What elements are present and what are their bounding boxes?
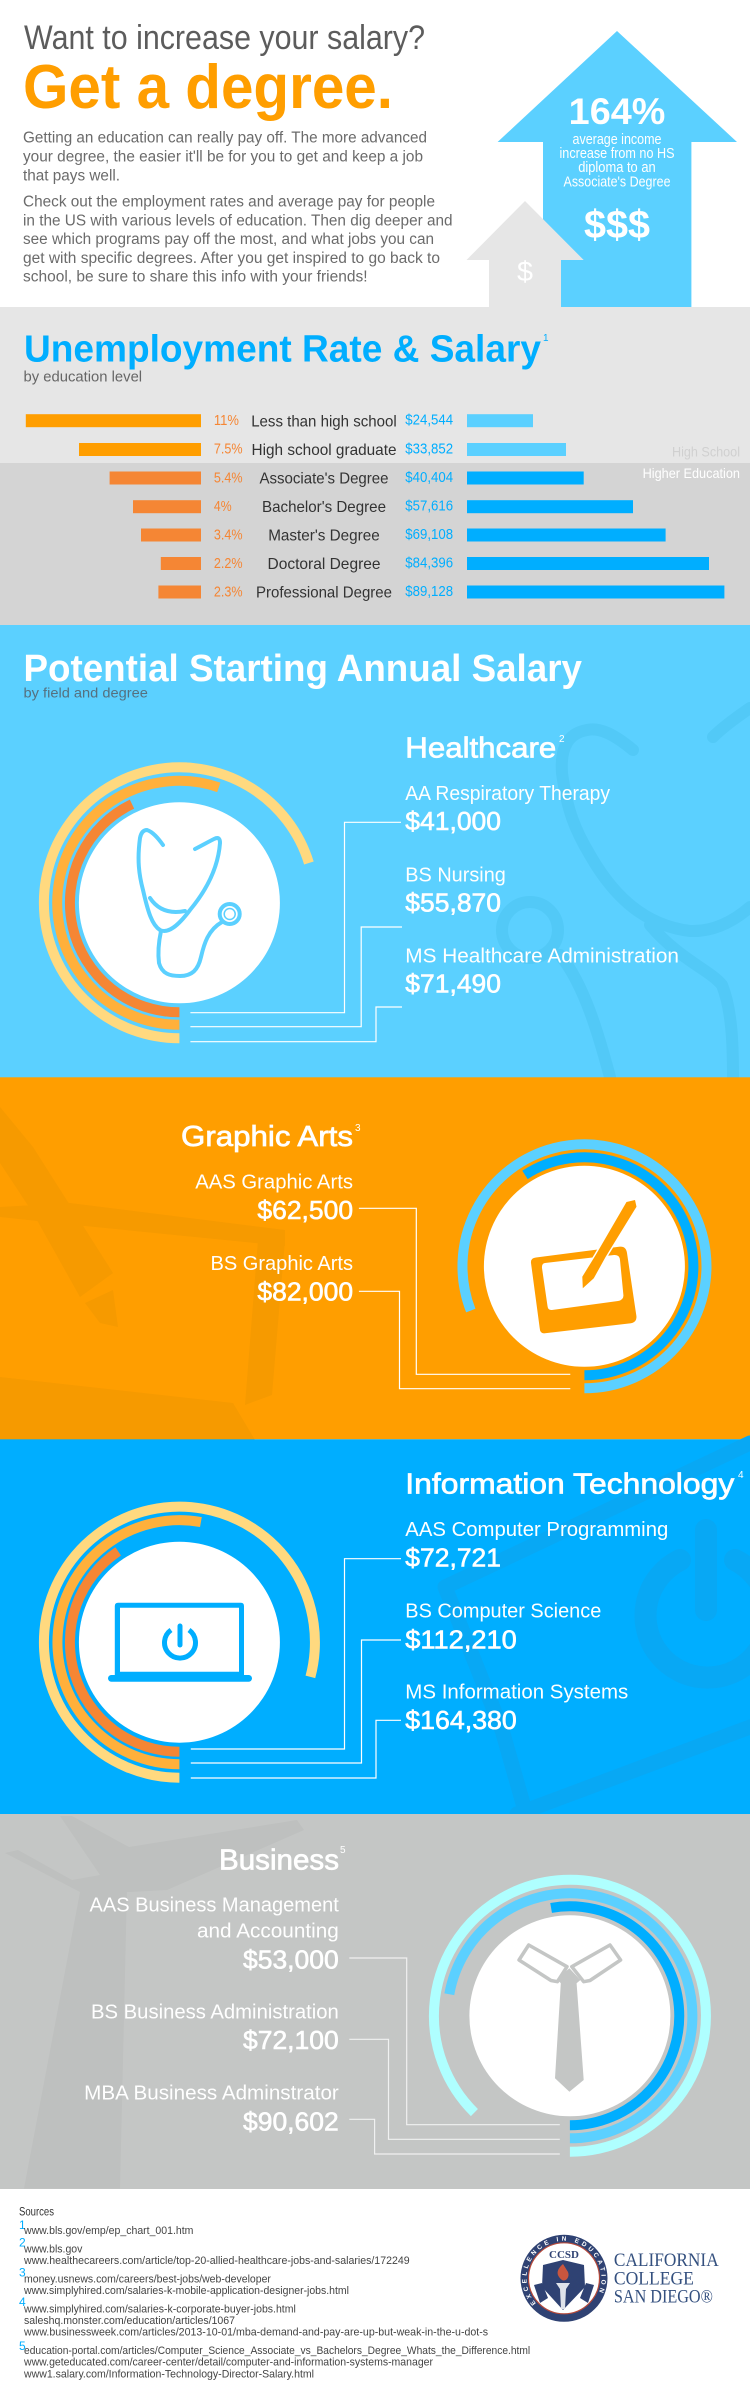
grey arrow with dollar sign: $ xyxy=(517,256,533,287)
title line: Want to increase your salary? xyxy=(24,19,425,57)
watermark tie xyxy=(5,1816,304,2188)
sources heading: Sources xyxy=(19,2207,54,2219)
salary: BS computer science: $112,210 xyxy=(405,1624,517,1654)
source group 5: www.geteducated.com/career-center/detail/computer-and-information-systems-manager xyxy=(23,2357,433,2369)
panel: graphic arts xyxy=(0,1077,750,1440)
education level labels: Doctoral Degree xyxy=(268,556,381,573)
salary: AAS graphic arts: $62,500 xyxy=(257,1195,353,1225)
connector lines xyxy=(190,822,402,1042)
source group 4: saleshq.monster.com/education/articles/1067 xyxy=(24,2315,235,2327)
salary: BS nursing xyxy=(405,864,506,918)
section subheading: by field and degree xyxy=(24,685,148,701)
blue arrow with statistic: increase from no HS xyxy=(560,146,674,162)
source group 4 xyxy=(19,2295,488,2339)
background xyxy=(0,1439,750,1814)
salary: MBA business administrator: $90,602 xyxy=(243,2107,339,2137)
connector lines xyxy=(359,1208,570,1389)
source group 4: www.simplyhired.com/salaries-k-corporate-buyer-jobs.html xyxy=(23,2303,296,2315)
salary: BS business administration: $72,100 xyxy=(243,2025,339,2055)
intro paragraph two: in the US with various levels of education. Then dig deeper and xyxy=(23,212,453,229)
salary: AAS business management: $53,000 xyxy=(243,1944,339,1974)
source group 4: 4 xyxy=(19,2295,26,2309)
source group 5: 5 xyxy=(19,2339,26,2353)
unemployment percentages: 11% xyxy=(214,413,239,429)
salary values: $89,128 xyxy=(405,584,453,600)
connector lines xyxy=(349,1958,560,2154)
salary bars xyxy=(467,414,724,598)
source group 4: www.businessweek.com/articles/2013-10-01/mba-demand-and-pay-are-up-but-weak-in-the-u-dot-s xyxy=(23,2327,488,2339)
salary: BS business administration xyxy=(91,2000,339,2055)
intro paragraph one: Getting an education can really pay off. The more advanced xyxy=(23,130,427,147)
salary: MBA business administrator: MBA Business Adminstrator xyxy=(84,2081,339,2104)
panel: unemployment rate and salary xyxy=(0,307,750,625)
background xyxy=(0,1077,750,1439)
title: get a degree: Get a degree. xyxy=(23,53,393,122)
field title: Business xyxy=(219,1844,339,1876)
watermark laptop and power symbol xyxy=(445,1443,750,1814)
salary: AAS computer programming: AAS Computer Programming xyxy=(405,1518,668,1541)
section heading: Potential Starting Annual Salary xyxy=(24,648,582,690)
background xyxy=(0,625,750,1078)
intro paragraph one xyxy=(23,130,427,184)
ring chart xyxy=(434,1880,706,2152)
field title: Information Technology xyxy=(405,1468,735,1500)
logo: college seal: EXCELLENCE IN EDUCATION xyxy=(522,2236,606,2306)
unemployment percentages: 4% xyxy=(214,499,232,515)
background high school band xyxy=(0,307,750,463)
source group 2 xyxy=(19,2236,410,2267)
blue arrow with statistic: diploma to an xyxy=(578,160,656,176)
salary: BS graphic arts: $82,000 xyxy=(257,1277,353,1307)
source group 2: www.bls.gov xyxy=(23,2243,83,2255)
salary values: $33,852 xyxy=(405,441,453,457)
icon: laptop with power symbol xyxy=(108,1603,252,1682)
logo: college name: COLLEGE xyxy=(614,2268,694,2289)
unemployment percentages: 5.4% xyxy=(214,470,243,486)
source group 2: www.healthecareers.com/article/top-20-allied-healthcare-jobs-and-salaries/172249 xyxy=(23,2255,410,2267)
source group 5: education-portal.com/articles/Computer_Science_Associate_vs_Bachelors_Degree_Whats_the_Difference.html xyxy=(24,2345,530,2357)
salary: MS information systems xyxy=(405,1681,628,1735)
logo: college name: SAN DIEGO® xyxy=(614,2287,713,2308)
panel: information technology xyxy=(0,1439,750,1814)
background higher education band xyxy=(0,463,750,625)
salary: AAS graphic arts xyxy=(195,1170,353,1225)
unemployment percentages: 7.5% xyxy=(214,442,243,458)
blue arrow with statistic: average income xyxy=(572,132,662,148)
intro paragraph two: Check out the employment rates and average pay for people xyxy=(23,194,435,211)
salary values: $57,616 xyxy=(405,499,453,515)
salary: AAS business management: and Accounting xyxy=(197,1920,339,1943)
unemployment percentages: 2.3% xyxy=(214,584,243,600)
legend: high school: High School xyxy=(672,444,740,460)
salary values: $24,544 xyxy=(405,413,453,429)
blue arrow with statistic: Associate's Degree xyxy=(564,175,670,191)
salary: AA respiratory therapy xyxy=(405,782,611,836)
legend: higher education: Higher Education xyxy=(643,465,740,481)
salary: BS graphic arts xyxy=(210,1252,353,1307)
background xyxy=(0,1814,750,2189)
intro paragraph two: see which programs pay off the most, and what jobs you can xyxy=(23,231,434,248)
grey arrow with dollar sign xyxy=(466,201,584,307)
blue arrow with statistic: 164% xyxy=(569,91,665,132)
footnote marker: 5 xyxy=(340,1845,346,1856)
panel: healthcare xyxy=(0,625,750,1078)
salary: AA respiratory therapy: $41,000 xyxy=(405,806,501,836)
watermark tablet and pen xyxy=(0,1107,285,1440)
unemployment percentages: 2.2% xyxy=(214,556,243,572)
logo: college seal: CCSD xyxy=(549,2249,579,2261)
education level labels: High school graduate xyxy=(252,442,397,459)
salary values xyxy=(405,413,453,600)
footnote marker: 2 xyxy=(559,734,565,745)
salary: AAS business management: AAS Business Management xyxy=(90,1894,339,1917)
education level labels: Professional Degree xyxy=(256,584,392,602)
field title: Healthcare xyxy=(405,733,556,765)
intro paragraph two xyxy=(23,194,453,286)
source group 3 xyxy=(19,2266,349,2297)
panel: business xyxy=(0,1814,750,2189)
panel: intro xyxy=(23,19,737,307)
salary: BS graphic arts: BS Graphic Arts xyxy=(210,1252,353,1275)
salary values: $69,108 xyxy=(405,527,453,543)
footnote marker: 4 xyxy=(738,1470,744,1481)
blue arrow with statistic: $$$ xyxy=(584,203,650,247)
source group 1 xyxy=(19,2218,193,2237)
icon: necktie and collar xyxy=(519,1945,621,2092)
source group 5: www1.salary.com/Information-Technology-Director-Salary.html xyxy=(23,2368,314,2380)
unemployment percentages: 3.4% xyxy=(214,528,243,544)
unemployment bars xyxy=(26,414,201,598)
source group 2: 2 xyxy=(19,2236,26,2250)
salary: BS nursing: BS Nursing xyxy=(405,864,506,887)
source group 3: 3 xyxy=(19,2266,26,2280)
watermark stethoscope xyxy=(502,708,750,1077)
salary: BS computer science: BS Computer Science xyxy=(405,1599,601,1622)
salary: MBA business administrator xyxy=(84,2081,339,2137)
salary: AA respiratory therapy: AA Respiratory Therapy xyxy=(405,782,611,805)
source group 3: www.simplyhired.com/salaries-k-mobile-application-designer-jobs.html xyxy=(23,2285,349,2297)
education level labels: Associate's Degree xyxy=(260,470,389,488)
salary: AAS business management xyxy=(90,1894,339,1974)
salary: AAS graphic arts: AAS Graphic Arts xyxy=(195,1170,353,1193)
source group 3: money.usnews.com/careers/best-jobs/web-developer xyxy=(24,2273,271,2285)
blue arrow with statistic xyxy=(498,31,737,307)
intro paragraph one: your degree, the easier it'll be for you to get and keep a job xyxy=(23,149,423,166)
salary: MS information systems: MS Information Systems xyxy=(405,1681,628,1704)
source group 1: 1 xyxy=(19,2218,26,2232)
salary: AAS computer programming: $72,721 xyxy=(405,1543,501,1573)
icon: stethoscope xyxy=(139,830,240,976)
logo: college name xyxy=(614,2250,719,2308)
footnote marker: 3 xyxy=(355,1123,361,1134)
intro paragraph two: get with specific degrees. After you get inspired to go back to xyxy=(23,250,440,267)
unemployment percentages xyxy=(214,413,243,600)
connector lines xyxy=(191,1559,401,1778)
source group 5 xyxy=(19,2339,530,2380)
ring chart xyxy=(44,767,309,1038)
source group 1: www.bls.gov/emp/ep_chart_001.htm xyxy=(23,2225,193,2237)
field title: Graphic Arts xyxy=(181,1121,353,1153)
salary: AAS computer programming xyxy=(405,1518,668,1573)
salary: MS healthcare administration xyxy=(405,945,679,999)
education level labels: Bachelor's Degree xyxy=(262,499,386,516)
education level labels: Less than high school xyxy=(251,414,397,430)
salary: MS healthcare administration: MS Healthcare Administration xyxy=(405,945,679,968)
salary: BS nursing: $55,870 xyxy=(405,888,501,918)
footnote marker: 1 xyxy=(543,333,549,344)
salary: BS computer science xyxy=(405,1599,601,1654)
ring chart xyxy=(44,1507,315,1778)
salary: BS business administration: BS Business Administration xyxy=(91,2000,339,2023)
ring chart xyxy=(462,1144,706,1388)
salary values: $40,404 xyxy=(405,470,453,486)
heading: Unemployment Rate & Salary xyxy=(24,329,541,371)
intro paragraph one: that pays well. xyxy=(23,167,120,184)
salary: MS information systems: $164,380 xyxy=(405,1705,517,1735)
salary values: $84,396 xyxy=(405,556,453,572)
education level labels xyxy=(251,414,397,602)
panel: sources xyxy=(19,2207,719,2380)
subheading: by education level xyxy=(24,370,142,386)
logo: college name: CALIFORNIA xyxy=(614,2250,719,2271)
intro paragraph two: school, be sure to share this info with your friends! xyxy=(23,269,368,286)
icon: tablet and pen xyxy=(531,1200,636,1333)
salary: MS healthcare administration: $71,490 xyxy=(405,969,501,999)
education level labels: Master's Degree xyxy=(268,528,380,544)
